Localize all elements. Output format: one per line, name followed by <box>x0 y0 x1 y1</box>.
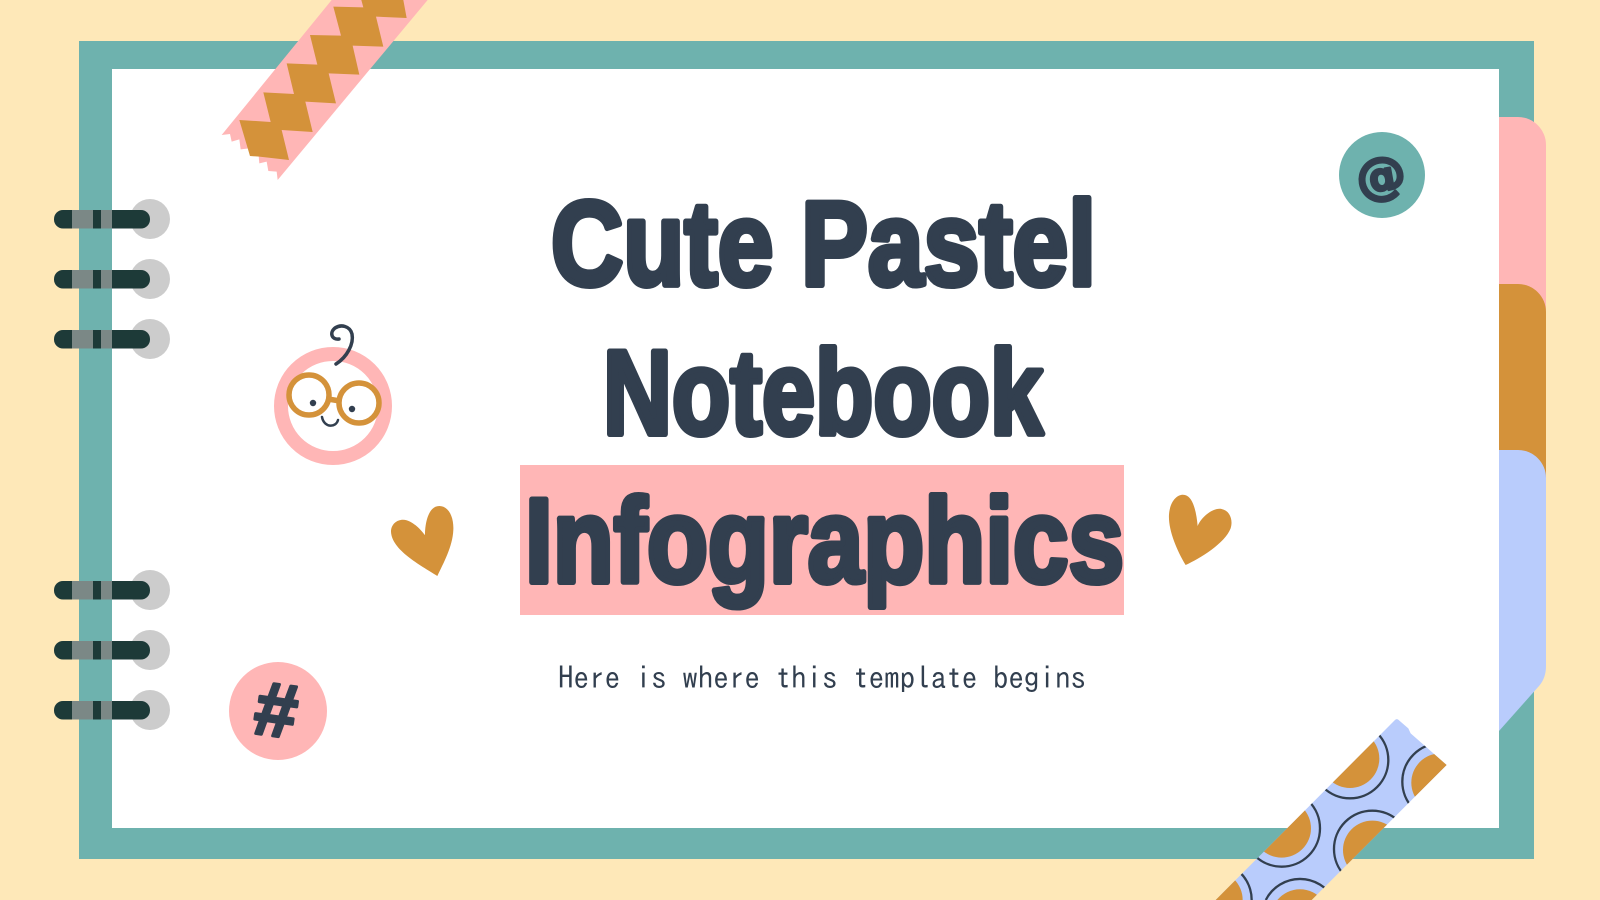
tab: blue <box>1499 450 1546 731</box>
subtitle: Here is where this template begins <box>558 662 1086 693</box>
icon: hash badge <box>229 662 327 760</box>
title: line 1: Cute Pastel <box>551 177 1096 311</box>
icon: left heart <box>391 506 453 576</box>
icon: at-sign badge <box>1339 132 1425 218</box>
icon: at-sign badge: @ <box>1351 143 1410 209</box>
tab: orange <box>1499 284 1546 490</box>
icon: hash badge: # <box>249 665 303 756</box>
title: line 2: Notebook <box>603 326 1043 460</box>
washi tape: blue half circles <box>1216 719 1446 900</box>
icon: baby face with glasses <box>281 326 385 458</box>
index tabs <box>1499 117 1546 731</box>
panel: white notebook page <box>112 69 1499 828</box>
tab: pink <box>1499 117 1546 320</box>
title: highlighted line 3: Infographics <box>525 474 1124 608</box>
spiral rings: upper group <box>54 199 170 359</box>
spiral rings: lower group <box>54 570 170 730</box>
icon: right heart <box>1169 495 1232 565</box>
washi tape: pink zigzag <box>222 0 428 180</box>
